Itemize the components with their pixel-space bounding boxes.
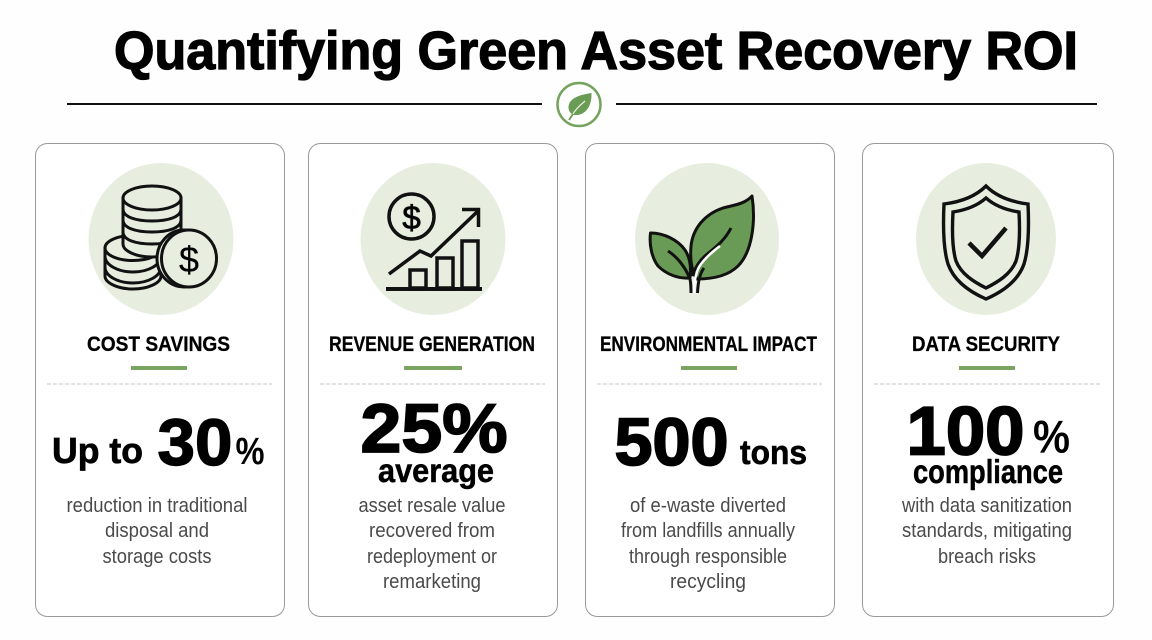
icon: leaf badge (558, 83, 600, 126)
description: breach risks (938, 546, 1036, 568)
metric: 30 (158, 405, 232, 479)
metric: % (236, 431, 264, 473)
description (358, 495, 506, 593)
icon: shield (916, 163, 1056, 315)
heading: ENVIRONMENTAL IMPACT (600, 332, 817, 356)
metric: compliance (913, 453, 1063, 490)
description: of e-waste diverted (630, 495, 786, 517)
description (621, 495, 795, 593)
title divider with leaf badge (67, 83, 1097, 126)
description: storage costs (102, 546, 212, 568)
description: recycling (670, 571, 746, 593)
description: remarketing (383, 571, 481, 593)
accent bar (681, 366, 737, 370)
metric: average (378, 452, 494, 489)
icon: sprout (635, 163, 779, 315)
accent bar (959, 366, 1015, 370)
panel: environmental impact (586, 144, 834, 616)
icon: coins (88, 163, 234, 315)
metric (614, 405, 807, 480)
metric: 100 (906, 392, 1024, 470)
panel: revenue generation (308, 144, 558, 616)
description: asset resale value (358, 495, 506, 517)
metric (52, 405, 264, 479)
description: with data sanitization (901, 495, 1072, 517)
description: redeployment or (367, 546, 497, 568)
icon: growth chart: $ (402, 199, 421, 236)
description: standards, mitigating (902, 520, 1072, 542)
metric: % (1033, 410, 1070, 462)
heading: DATA SECURITY (912, 332, 1060, 356)
metric (906, 392, 1070, 490)
title: Quantifying Green Asset Recovery ROI (114, 21, 1078, 81)
description (66, 495, 248, 568)
accent bar (131, 366, 187, 370)
metric: 500 (614, 405, 728, 480)
description: reduction in traditional (66, 495, 248, 517)
metric: 25% (360, 390, 508, 467)
heading: COST SAVINGS (87, 332, 230, 356)
heading: REVENUE GENERATION (329, 332, 535, 356)
description: through responsible (629, 546, 787, 568)
icon: growth chart (360, 163, 506, 315)
metric: tons (740, 434, 807, 472)
panel: data security (862, 144, 1114, 616)
description: from landfills annually (621, 520, 795, 542)
accent bar (404, 366, 462, 370)
description: disposal and (105, 520, 209, 542)
metric: Up to (52, 430, 143, 471)
description (901, 495, 1072, 568)
icon: coins: $ (179, 239, 199, 280)
panel: cost savings (36, 144, 284, 616)
description: recovered from (369, 520, 495, 542)
